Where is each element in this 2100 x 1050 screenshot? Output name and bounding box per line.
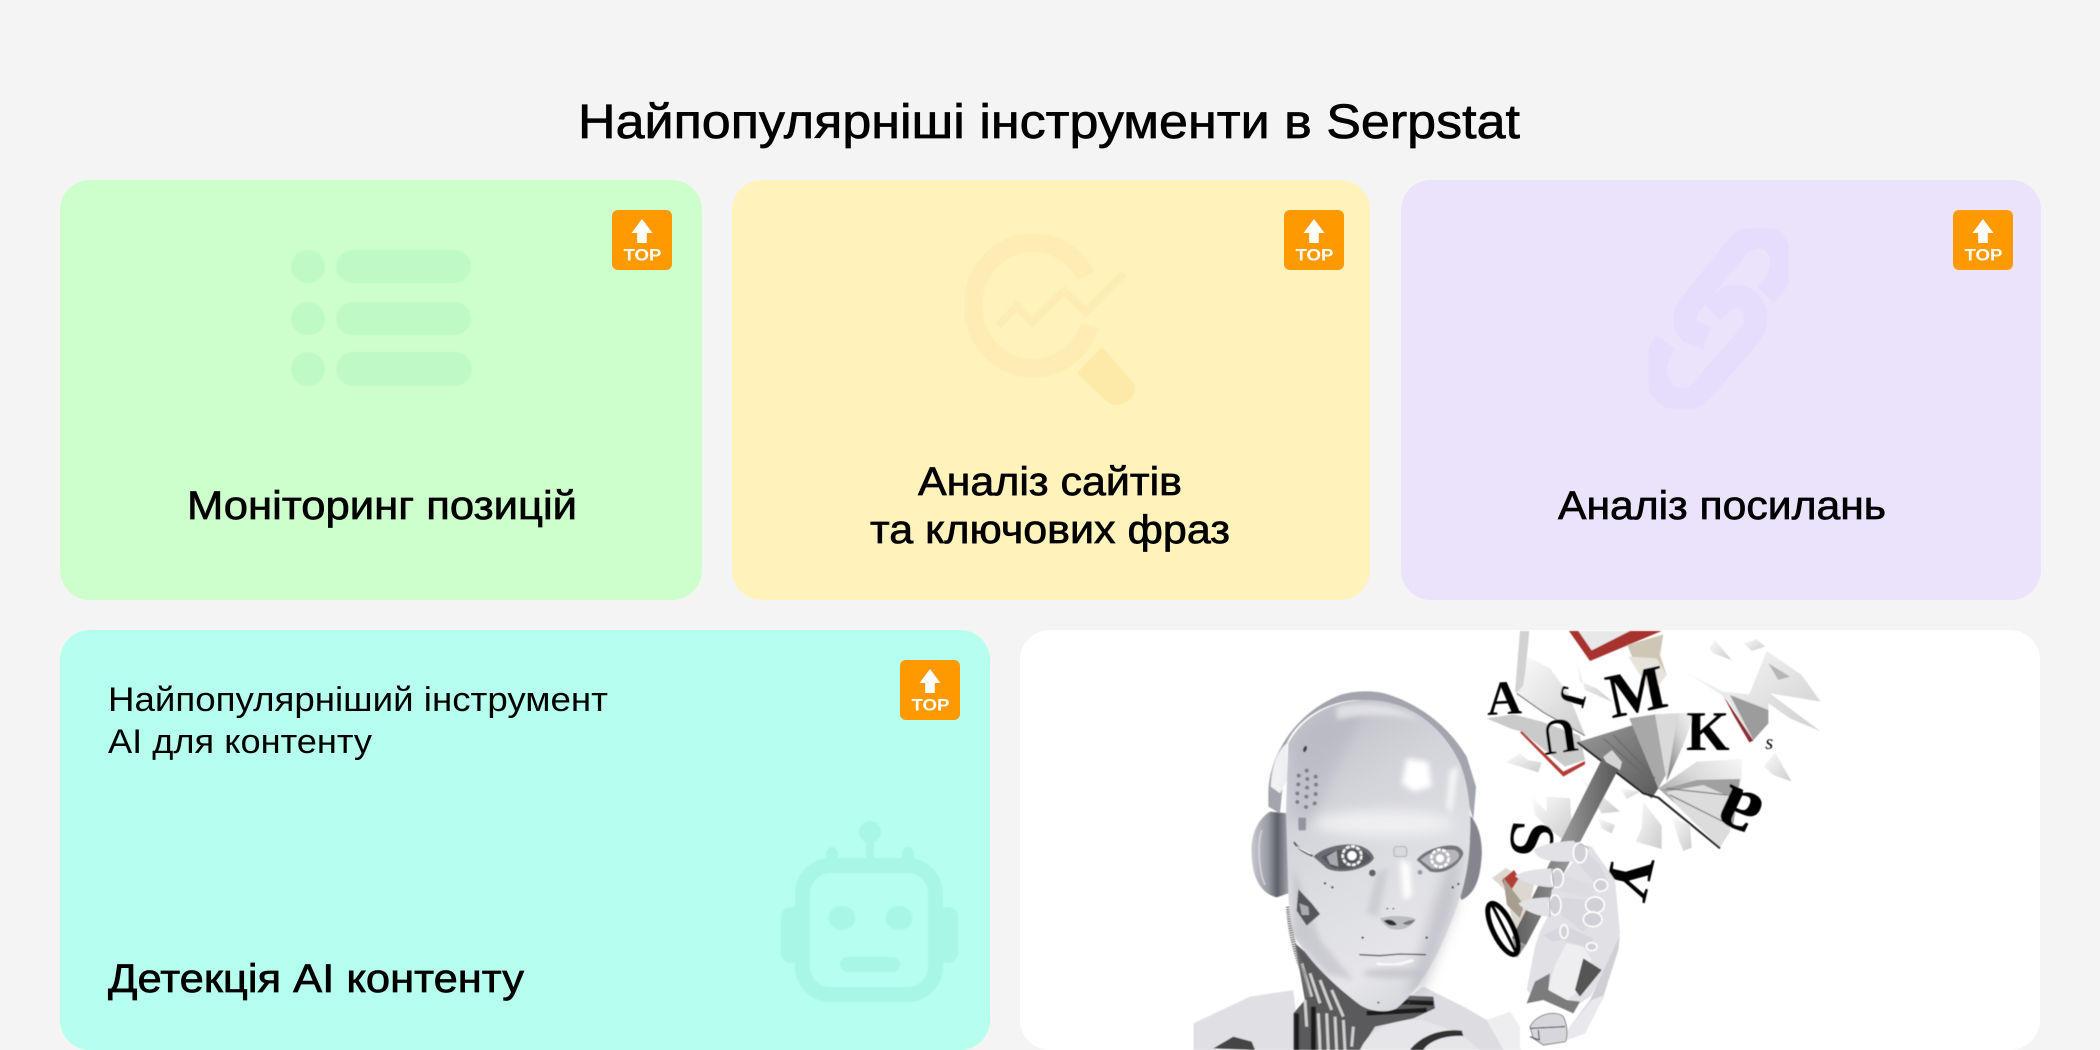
badge: top: TOP [624, 246, 662, 264]
letters: A [1485, 671, 1523, 726]
description text: AI для контенту [108, 723, 372, 761]
title: Найпопулярніші інструменти в Serpstat [578, 96, 1520, 149]
badge: top [900, 660, 960, 720]
book: top red [1569, 631, 1662, 661]
panel: position monitoring [60, 180, 702, 600]
book: upper left [1515, 631, 1529, 693]
letters [1485, 651, 1775, 867]
panel: site and keyword analysis [732, 180, 1370, 600]
headphone right [1458, 815, 1482, 900]
card heading: Детекція AI контенту [108, 957, 524, 1001]
badge: top: TOP [1296, 246, 1334, 264]
panel: site and keyword analysis: та ключових фраз [870, 508, 1230, 552]
headphone left [1251, 812, 1288, 897]
book: central open [1577, 725, 1658, 798]
badge: top [612, 210, 672, 270]
card heading: Моніторинг позицій [187, 484, 577, 528]
book: tan pages [1627, 634, 1667, 693]
badge: top [1284, 210, 1344, 270]
right eye [1417, 845, 1463, 872]
neck mechanics [1293, 943, 1435, 1050]
face [1286, 700, 1470, 1011]
illustration: flying books and paper [1485, 631, 1821, 867]
badge: top: TOP [912, 696, 950, 714]
letters: J [1550, 682, 1595, 711]
panel: link analysis [1401, 180, 2041, 600]
face shading [1292, 704, 1463, 997]
icon: list [291, 250, 472, 386]
letters: U [1538, 707, 1582, 767]
letters: a [1698, 766, 1775, 867]
letters: K [1686, 701, 1730, 763]
nose [1380, 916, 1416, 930]
icon: robot [781, 821, 958, 994]
letters: s [1765, 732, 1773, 754]
illustration: more letters: Y [1590, 847, 1670, 908]
book: right [1688, 651, 1821, 741]
badge: top [1953, 210, 2013, 270]
left eye [1294, 842, 1374, 871]
panel: robot illustration [1020, 630, 2040, 1050]
cheek and speaker details [1295, 745, 1459, 1004]
letters: M [1600, 651, 1673, 732]
shoulders [1193, 990, 1300, 1050]
illustration: robot hand [1514, 840, 1620, 1050]
description text: Найпопулярніший інструмент [108, 681, 608, 719]
icon: magnifier with chart [973, 242, 1135, 405]
illustration: more letters: S [1496, 819, 1569, 859]
description text [108, 681, 608, 761]
illustration: more letters [1484, 822, 1656, 958]
panel: AI content detection [60, 630, 990, 1050]
mouth [1359, 954, 1426, 965]
card heading: Аналіз сайтів [918, 460, 1182, 504]
icon: chain link [1655, 237, 1782, 400]
card heading: Аналіз посилань [1558, 484, 1886, 528]
illustration: robot head [1193, 691, 1520, 1050]
paper fragments [1506, 639, 1792, 851]
book: mid left [1487, 714, 1585, 767]
badge: top: TOP [1964, 246, 2002, 264]
helmet band [1268, 691, 1476, 820]
illustration: pen and lower book [1492, 750, 1622, 958]
